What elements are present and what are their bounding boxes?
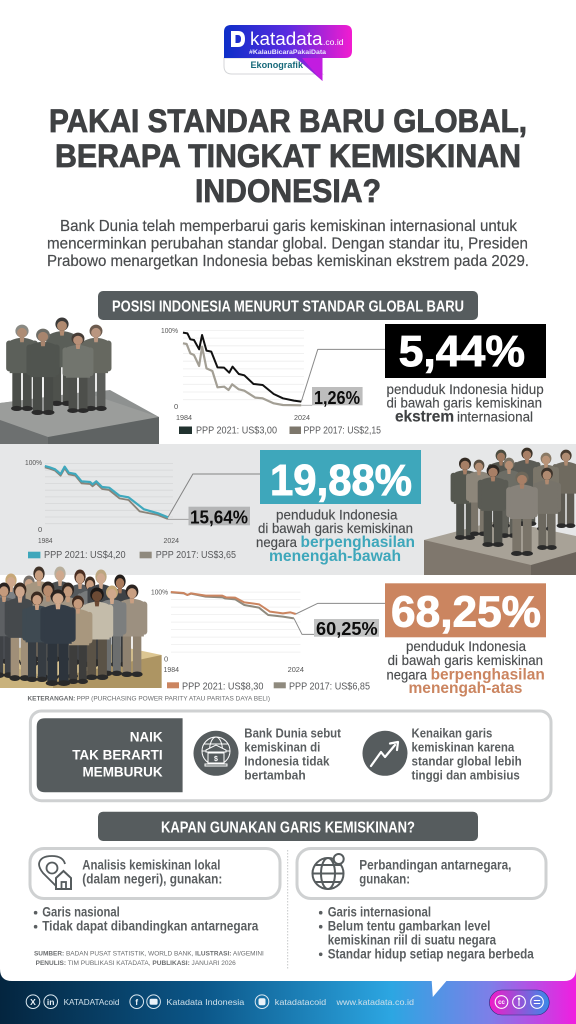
- value label: 1,26%: 1,26%: [314, 388, 360, 408]
- text: bank dunia: bertambah: [244, 768, 306, 782]
- text: perbandingan: Perbandingan antarnegara,: [359, 857, 511, 872]
- label block: MEMBURUK: [82, 765, 163, 780]
- text: bank dunia: [244, 727, 342, 782]
- logo: katadata ekonografik: .co.id: [323, 38, 344, 47]
- list: antarnegara: kemiskinan riil di suatu negara: [328, 932, 496, 947]
- icon: world bank: [194, 731, 238, 776]
- footer: [0, 966, 576, 1024]
- list: lokal: Tidak dapat dibandingkan antarnegara: [42, 919, 259, 934]
- illustration: workers on platform: [424, 448, 576, 575]
- intro text: [47, 218, 529, 270]
- chart: extreme poverty line: [161, 326, 385, 437]
- caption: upper-middle: menengah-atas: [408, 680, 522, 697]
- icon: rising arrow: [362, 731, 408, 776]
- caption: extreme: di bawah garis kemiskinan: [386, 395, 542, 411]
- note: keterangan: PPP (PURCHASING POWER PARITY ATAU PARITAS DAYA BELI): [76, 696, 270, 703]
- source credits: SUMBER: BADAN PUSAT STATISTIK, WORLD BANK, ILUSTRASI: AI/GEMINI: [34, 951, 264, 958]
- logo: katadata ekonografik: katadata: [250, 28, 323, 49]
- social icons and handles: katadatacoid: [275, 997, 326, 1007]
- chart: lower-middle poverty line: 0: [38, 525, 42, 534]
- social icons and handles: Katadata Indonesia: [166, 997, 245, 1007]
- chart: upper-middle poverty line: [151, 587, 385, 693]
- text: perbandingan: [359, 857, 511, 886]
- note: keterangan: KETERANGAN:: [28, 696, 75, 703]
- value label: 60,25%: 60,25%: [316, 619, 378, 639]
- caption: upper-middle: [386, 638, 545, 697]
- chart: extreme poverty line: 0: [174, 402, 178, 411]
- social icons and handles: [26, 995, 414, 1008]
- social icons and handles: in: [47, 997, 54, 1007]
- illustration: extreme poor people on cracked stone: [0, 318, 159, 444]
- title: BERAPA TINGKAT KEMISKINAN: [55, 138, 521, 174]
- creative commons badge: [489, 990, 549, 1015]
- text: analisis: Analisis kemiskinan lokal: [82, 857, 220, 872]
- text: kenaikan garis: [412, 727, 522, 782]
- text: analisis: [82, 857, 222, 886]
- source credits: PENULIS: TIM PUBLIKASI KATADATA, PUBLIKASI: JANUARI 2026: [36, 960, 236, 967]
- logo: katadata ekonografik: Ekonografik: [250, 60, 304, 70]
- chart: extreme poverty line: 2024: [294, 413, 310, 422]
- chart: upper-middle poverty line: 2024: [288, 665, 304, 674]
- intro text: Bank Dunia telah memperbarui garis kemiskinan internasional untuk: [60, 218, 517, 235]
- illustration: professionals on tan platform: [0, 567, 162, 688]
- chart: upper-middle poverty line: 0: [164, 655, 168, 664]
- title: INDONESIA?: [195, 173, 381, 209]
- heading bar: posisi indonesia: [98, 291, 478, 320]
- callout: 5,44%: 5,44%: [399, 327, 525, 376]
- caption: lower-middle: penduduk Indonesia: [276, 506, 398, 522]
- list: antarnegara: [319, 905, 534, 961]
- chart: lower-middle poverty line: 100%: [25, 458, 42, 467]
- callout: 19,88%: 19,88%: [270, 456, 412, 505]
- chart: lower-middle poverty line: PPP 2017: US$3,65: [156, 550, 236, 561]
- list: lokal: [34, 905, 259, 934]
- caption: extreme: [386, 381, 544, 426]
- text: kenaikan garis: Kenaikan garis: [412, 727, 492, 741]
- text: bank dunia: kemiskinan di: [244, 741, 320, 755]
- social icons and handles: f: [135, 997, 138, 1007]
- social icons and handles: KATADATAcoid: [64, 997, 120, 1007]
- text: kenaikan garis: tinggi dan ambisius: [412, 768, 520, 782]
- chart: lower-middle poverty line: 2024: [164, 536, 179, 545]
- panel: naik tak berarti memburuk: [30, 711, 551, 801]
- caption: extreme: ekstrem: [395, 409, 454, 426]
- callout: 68,25%: 68,25%: [391, 588, 541, 637]
- caption: upper-middle: di bawah garis kemiskinan: [388, 652, 543, 668]
- chart: lower-middle poverty line: [25, 458, 260, 561]
- creative commons badge: cc: [498, 1000, 505, 1006]
- value label: 15,64%: 15,64%: [190, 508, 248, 528]
- caption: lower-middle: berpenghasilan: [300, 534, 415, 551]
- chart: extreme poverty line: PPP 2021: US$3,00: [196, 426, 277, 437]
- heading bar: posisi indonesia: POSISI INDONESIA MENURUT STANDAR GLOBAL BARU: [112, 298, 464, 315]
- panel: perbandingan antarnegara: [297, 848, 546, 898]
- caption: extreme: penduduk Indonesia hidup: [386, 381, 544, 397]
- logo: katadata ekonografik: [224, 25, 352, 81]
- chart: lower-middle poverty line: 1984: [38, 536, 52, 545]
- caption: lower-middle: menengah-bawah: [269, 548, 401, 565]
- logo: katadata ekonografik: #KalauBicaraPakaiData: [249, 49, 326, 56]
- caption: lower-middle: negara: [256, 534, 297, 550]
- text: bank dunia: Bank Dunia sebut: [244, 727, 342, 741]
- caption: upper-middle: penduduk Indonesia: [406, 638, 526, 654]
- chart: extreme poverty line: 100%: [161, 326, 178, 335]
- social icons and handles: X: [30, 997, 36, 1007]
- social icons and handles: www.katadata.co.id: [335, 997, 414, 1007]
- icon: world bank: $: [214, 756, 218, 763]
- caption: lower-middle: di bawah garis kemiskinan: [258, 520, 413, 536]
- list: lokal: Garis nasional: [42, 905, 120, 920]
- text: kenaikan garis: standar global lebih: [412, 755, 522, 769]
- icon: globe: [312, 854, 344, 889]
- icon: pin and house: [39, 856, 71, 889]
- chart: extreme poverty line: 1984: [176, 413, 192, 422]
- source credits: [34, 951, 264, 967]
- title: PAKAI STANDAR BARU GLOBAL,: [49, 103, 527, 139]
- label block: [37, 718, 183, 792]
- panel: analisis lokal: [30, 848, 280, 898]
- heading bar: kapan gunakan: [98, 812, 478, 841]
- intro text: mencerminkan perubahan standar global. Dengan standar itu, Presiden: [47, 236, 528, 253]
- caption: upper-middle: negara: [386, 666, 427, 682]
- text: perbandingan: gunakan:: [359, 871, 410, 886]
- chart: upper-middle poverty line: 100%: [151, 587, 168, 596]
- label block: NAIK: [130, 730, 163, 745]
- text: kenaikan garis: kemiskinan karena: [412, 741, 515, 755]
- chart: upper-middle poverty line: PPP 2021: US$8,30: [182, 682, 264, 693]
- chart: upper-middle poverty line: 1984: [164, 665, 179, 674]
- list: antarnegara: Belum tentu gambarkan level: [328, 919, 490, 934]
- chart: upper-middle poverty line: PPP 2017: US$6,85: [289, 682, 370, 693]
- label block: TAK BERARTI: [72, 747, 163, 762]
- panel: lower-middle income: [0, 444, 576, 575]
- intro text: Prabowo menargetkan Indonesia bebas kemiskinan ekstrem pada 2029.: [47, 253, 529, 270]
- list: antarnegara: Standar hidup setiap negara berbeda: [328, 946, 534, 961]
- caption: lower-middle: [256, 506, 415, 565]
- chart: lower-middle poverty line: PPP 2021: US$4,20: [44, 550, 126, 561]
- caption: upper-middle: berpenghasilan: [431, 666, 545, 683]
- heading bar: kapan gunakan: KAPAN GUNAKAN GARIS KEMISKINAN?: [161, 820, 415, 837]
- chart: extreme poverty line: PPP 2017: US$2,15: [304, 426, 381, 437]
- text: bank dunia: Indonesia tidak: [244, 755, 330, 769]
- caption: extreme: internasional: [457, 409, 533, 425]
- title: [49, 103, 527, 209]
- text: analisis: (dalam negeri), gunakan:: [82, 871, 222, 886]
- list: antarnegara: Garis internasional: [328, 905, 431, 920]
